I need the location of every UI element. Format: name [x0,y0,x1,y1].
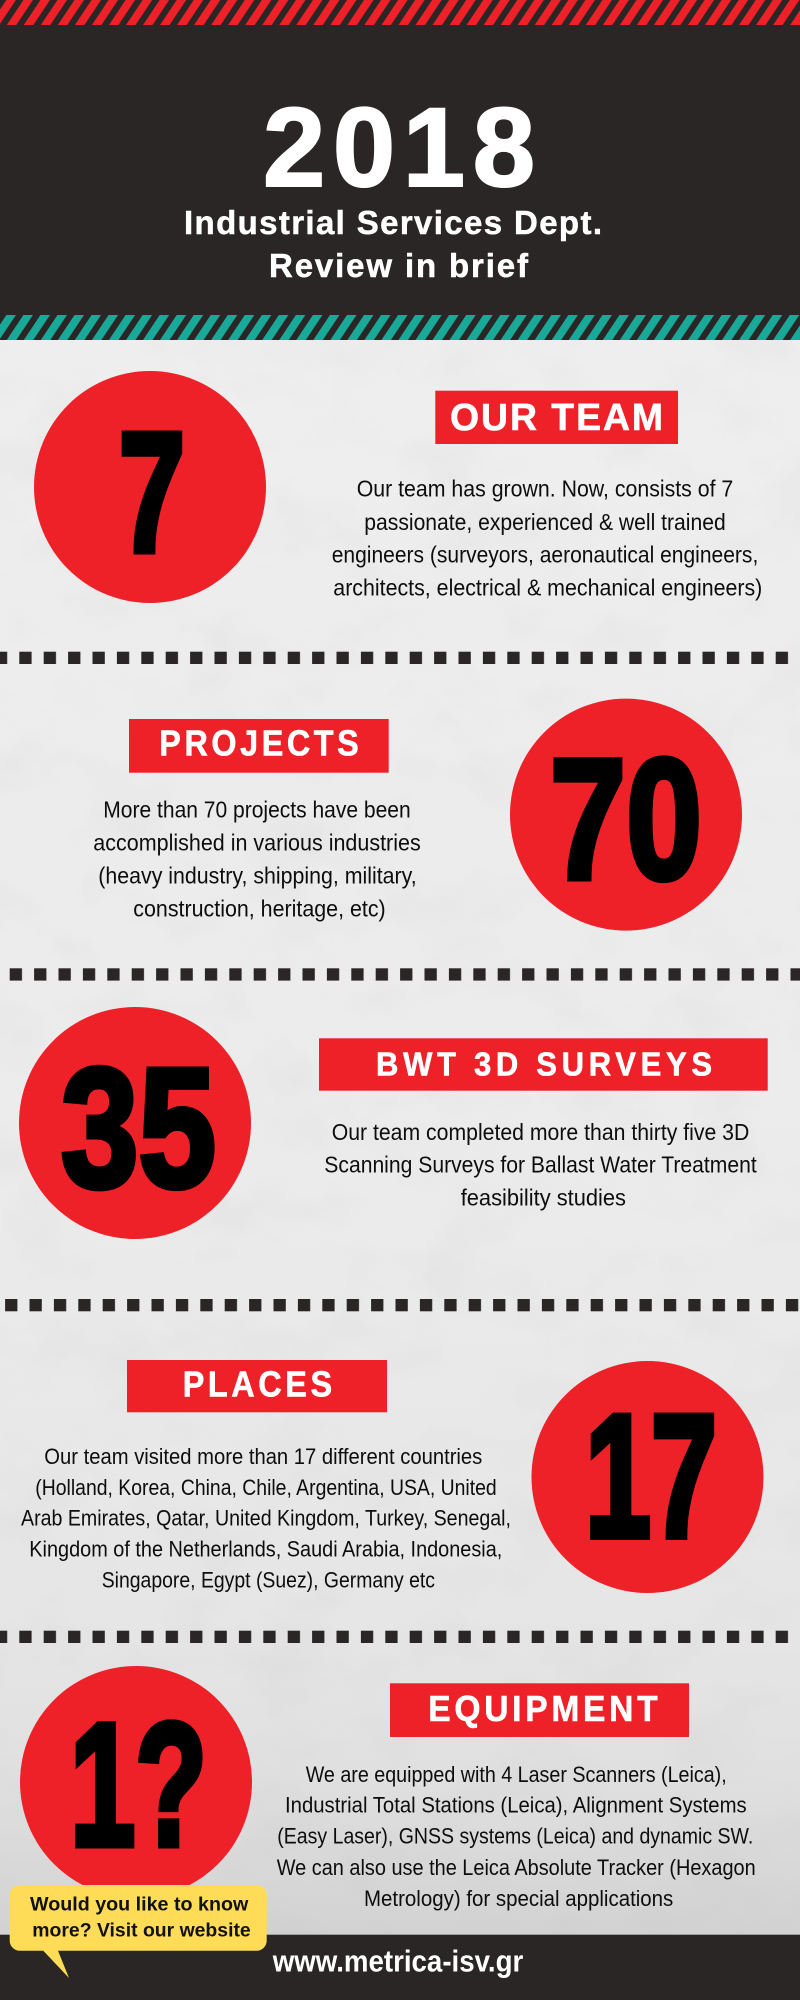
callout bubble: Would you like to know [30,1895,249,1916]
footer website url: www.metrica-isv.gr [272,1944,523,1979]
heading: equipment: EQUIPMENT [428,1688,661,1729]
number circle 7: 7 [119,398,185,588]
heading: places [127,1360,387,1412]
body text: bwt 3d surveys [324,1119,757,1211]
body text: our team: passionate, experienced & well trained [364,509,726,535]
paper texture background [0,340,800,1935]
body text: our team [332,476,762,601]
body text: equipment: We can also use the Leica Absolute Tracker (Hexagon [277,1855,756,1880]
body text: equipment: (Easy Laser), GNSS systems (Leica) and dynamic SW. [277,1824,753,1849]
body text: equipment: Industrial Total Stations (Leica), Alignment Systems [285,1793,747,1818]
header band [0,0,800,340]
body text: places: Singapore, Egypt (Suez), Germany etc [102,1568,435,1593]
heading: our team: OUR TEAM [450,397,665,439]
panel: projects [93,699,742,931]
heading: projects: PROJECTS [159,723,362,764]
subtitle: Industrial Services Dept. [184,204,602,241]
panel: bwt 3d surveys [19,1007,768,1239]
number circle 17 [532,1361,764,1593]
body text: places: Our team visited more than 17 different countries [44,1444,482,1469]
subtitle [184,204,602,284]
body text: our team: Our team has grown. Now, consists of 7 [357,476,733,502]
heading: places: PLACES [183,1364,336,1405]
body text: places [21,1444,511,1593]
body text: projects [93,797,421,922]
heading: bwt 3d surveys: BWT 3D SURVEYS [376,1046,717,1083]
callout bubble: more? Visit our website [32,1921,251,1942]
body text: bwt 3d surveys: feasibility studies [461,1185,626,1211]
body text: bwt 3d surveys: Scanning Surveys for Ballast Water Treatment [324,1152,757,1178]
number circle 35 [19,1007,251,1239]
panel: equipment [20,1666,756,1911]
number circle 35: 35 [61,1034,216,1224]
body text: projects: construction, heritage, etc) [133,896,386,922]
body text: projects: (heavy industry, shipping, military, [98,863,417,889]
divider 1 [0,652,800,664]
footer band [0,1935,800,2000]
divider 4 [0,1631,800,1643]
body text: our team: engineers (surveyors, aeronautical engineers, [332,542,758,568]
body text: equipment: Metrology) for special applications [364,1886,673,1911]
number circle 17: 17 [585,1380,717,1574]
body text: equipment: We are equipped with 4 Laser Scanners (Leica), [306,1762,727,1787]
number circle 1?: 1? [70,1688,207,1883]
body text: places: (Holland, Korea, China, Chile, Argentina, USA, United [35,1475,497,1500]
number circle 1? [20,1666,252,1898]
body text: projects: accomplished in various industries [93,829,421,855]
body text: bwt 3d surveys: Our team completed more than thirty five 3D [332,1119,749,1145]
heading: bwt 3d surveys [319,1038,768,1091]
title: 2018: 2018 [263,85,535,210]
divider 3 [0,1299,800,1311]
body text: projects: More than 70 projects have been [103,797,411,823]
body text: places: Arab Emirates, Qatar, United Kingdom, Turkey, Senegal, [21,1506,511,1531]
panel: places [21,1360,764,1593]
heading: projects [129,719,389,773]
number circle 70 [510,699,742,931]
panel: our team [34,371,762,603]
subtitle: Review in brief [269,247,529,284]
callout bubble [10,1885,267,1978]
heading: equipment [390,1683,689,1737]
body text: equipment [277,1762,756,1911]
divider 2 [9,968,800,981]
number circle 7 [34,371,266,603]
body text: our team: architects, electrical & mechanical engineers) [333,575,762,601]
number circle 70: 70 [550,724,702,916]
body text: places: Kingdom of the Netherlands, Saudi Arabia, Indonesia, [29,1537,502,1562]
